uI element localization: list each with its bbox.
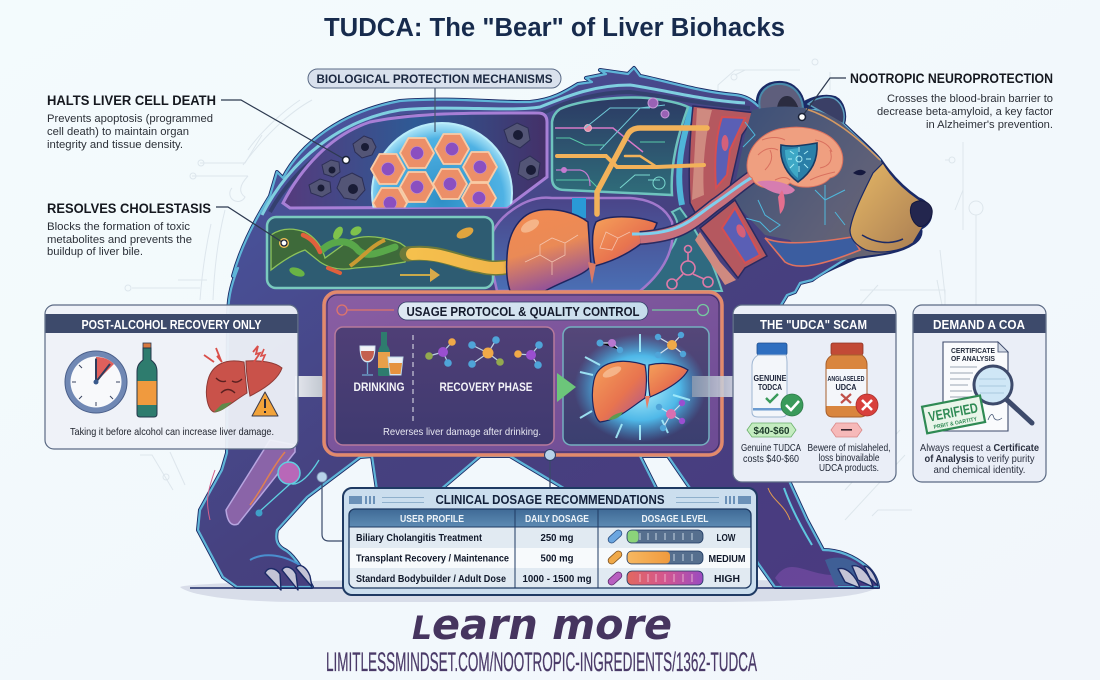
- callout: resolves cholestasis: [47, 201, 287, 258]
- drinking and recovery panel: Reverses liver damage after drinking.: [383, 426, 541, 438]
- callout: nootropic neuroprotection: in Alzheimer's prevention.: [926, 119, 1053, 131]
- drinking and recovery panel: DRINKING: [354, 382, 405, 394]
- table: clinical dosage recommendations: CLINICAL DOSAGE RECOMMENDATIONS: [436, 493, 664, 507]
- icon: wine glass: [360, 346, 375, 375]
- orange vessels: [557, 128, 707, 214]
- level bar: medium: MEDIUM: [708, 554, 746, 565]
- icon: certificate: OF ANALYSIS: [951, 356, 995, 363]
- panel: post-alcohol recovery only: [45, 305, 327, 449]
- usage header pill: USAGE PROTOCOL & QUALITY CONTROL: [406, 305, 640, 319]
- pill: biological protection mechanisms: BIOLOGICAL PROTECTION MECHANISMS: [316, 74, 553, 86]
- arrow to usage panel: [295, 376, 327, 397]
- protective bubble with cells: [370, 122, 513, 208]
- claws: [265, 566, 312, 590]
- icon: damaged liver: [204, 346, 282, 412]
- head: [732, 84, 932, 266]
- blue band beside circuit panel: [679, 107, 692, 205]
- verified stamp: [922, 396, 985, 433]
- table grid: 1000 - 1500 mg: [522, 573, 592, 585]
- icon: clock: [65, 351, 127, 413]
- verified stamp: VERIFIED: [927, 399, 979, 425]
- panel: demand a COA: and chemical identity.: [934, 464, 1026, 476]
- callout: halts liver cell death: integrity and tissue density.: [47, 139, 183, 151]
- icon: molecules around liver: [596, 332, 686, 431]
- panel: bile duct: [267, 217, 525, 288]
- header: [914, 314, 1045, 333]
- minus tag: [831, 423, 862, 437]
- drinking and recovery panel: RECOVERY PHASE: [440, 382, 533, 394]
- icon: bottle: [378, 332, 390, 376]
- callout: halts liver cell death: Prevents apoptosis (programmed: [47, 113, 213, 125]
- level bar: low: LOW: [716, 533, 736, 544]
- verified stamp: PRBIT & OARTITY: [933, 417, 978, 431]
- panel: demand a COA: [913, 305, 1046, 482]
- icon: tumbler: [388, 357, 403, 375]
- panel: the UDCA scam: [692, 305, 896, 482]
- callout: nootropic neuroprotection: decrease beta-amyloid, a key factor: [877, 106, 1053, 118]
- panel: neck vessels upper: [689, 106, 757, 222]
- table grid: Transplant Recovery / Maintenance: [356, 552, 509, 564]
- connector: usage to table: [544, 450, 556, 490]
- price tag: [747, 423, 796, 437]
- callout: resolves cholestasis: Blocks the formation of toxic: [47, 221, 191, 233]
- table grid: DOSAGE LEVEL: [642, 513, 709, 525]
- hind leg detail: [208, 440, 319, 590]
- panel: usage protocol and quality control: [324, 292, 722, 455]
- panel: the UDCA scam: UDCA products.: [819, 463, 879, 474]
- panel: the UDCA scam: Genuine TUDCA: [741, 443, 801, 454]
- nose: [910, 201, 932, 226]
- level bar: medium: [607, 550, 746, 565]
- icon: bottle: [137, 343, 157, 417]
- arrow: green: [557, 373, 576, 402]
- icon: certificate: [943, 342, 1008, 431]
- damaged cells: [309, 123, 540, 200]
- snout: [850, 163, 926, 252]
- icon: shield: [781, 143, 817, 182]
- drinking and recovery panel: [335, 327, 554, 445]
- level bar: low: [607, 529, 736, 544]
- callout: nootropic neuroprotection: Crosses the blood-brain barrier to: [887, 93, 1053, 105]
- icon: mislabeled bottle: [826, 343, 878, 417]
- header: POST-ALCOHOL RECOVERY ONLY: [82, 318, 262, 332]
- bear illustration: [190, 68, 932, 590]
- icon: warning triangle: [252, 392, 278, 416]
- call to action: learn more: Learn more: [412, 600, 672, 649]
- pill: biological protection mechanisms: [308, 69, 561, 132]
- icon: mislabeled bottle: ANGLASELED: [828, 376, 864, 383]
- liver: [507, 210, 657, 291]
- header: [46, 314, 297, 333]
- callout: resolves cholestasis: buildup of liver bile.: [47, 246, 143, 258]
- table grid: USER PROFILE: [400, 513, 464, 525]
- front leg detail: [190, 488, 880, 588]
- bear silhouette: [198, 68, 930, 587]
- panel: circuit network: [552, 97, 688, 195]
- panel: the UDCA scam: Bewere of mislaheled,: [808, 443, 890, 454]
- header: [734, 314, 895, 333]
- ears: [759, 84, 844, 124]
- table grid: 250 mg: [540, 532, 574, 544]
- icon: mislabeled bottle: UDCA: [836, 383, 857, 392]
- eye: [853, 170, 866, 175]
- header: THE "UDCA" SCAM: [760, 318, 867, 332]
- panel: lower teal molecule pocket: [640, 208, 722, 291]
- healed liver panel: [563, 327, 709, 445]
- callout: nootropic neuroprotection: [798, 71, 1053, 131]
- icon: magnifier: [974, 366, 1032, 423]
- level bar: high: [607, 571, 740, 586]
- ground shadow: [180, 579, 880, 602]
- table grid: Biliary Cholangitis Treatment: [356, 532, 482, 544]
- icon: genuine bottle: TODCA: [758, 383, 782, 392]
- callout: resolves cholestasis: RESOLVES CHOLESTASIS: [47, 201, 211, 216]
- table grid: Standard Bodybuilder / Adult Dose: [356, 573, 506, 585]
- panel: liver pocket: [488, 198, 673, 291]
- callout: halts liver cell death: cell death) to maintain organ: [47, 126, 189, 138]
- panel: the UDCA scam: costs $40-$60: [743, 454, 799, 465]
- pipe to brain: [632, 172, 762, 238]
- price tag: $40-$60: [754, 426, 790, 437]
- table grid: DAILY DOSAGE: [525, 513, 589, 525]
- title: TUDCA: The "Bear" of Liver Biohacks: [324, 14, 785, 42]
- back contour band: [262, 85, 745, 215]
- icon: certificate: CERTIFICATE: [951, 348, 995, 355]
- panel: cell protection: [281, 112, 548, 210]
- brain: [747, 127, 843, 214]
- callout: halts liver cell death: [47, 93, 350, 164]
- icon: genuine bottle: GENUINE: [754, 374, 787, 383]
- panel: the UDCA scam: loss binovailable: [818, 453, 880, 464]
- panel: neck vessels lower: [695, 200, 767, 285]
- table grid: [349, 509, 751, 588]
- panel: demand a COA: of Analysis to verify purity: [924, 453, 1035, 465]
- header: DEMAND A COA: [933, 318, 1025, 332]
- neck band: [765, 237, 860, 266]
- callout: halts liver cell death: HALTS LIVER CELL DEATH: [47, 93, 216, 108]
- connector: leg to table: [317, 472, 344, 541]
- table grid: 500 mg: [540, 552, 574, 564]
- callout: resolves cholestasis: metabolites and prevents the: [47, 234, 192, 246]
- icon: genuine bottle: [752, 343, 803, 417]
- table: clinical dosage recommendations: [343, 488, 757, 595]
- panel: post-alcohol recovery only: Taking it before alcohol can increase liver damage.: [70, 426, 274, 438]
- panel: demand a COA: Always request a Certificate: [920, 442, 1039, 454]
- level bar: high: HIGH: [714, 574, 740, 585]
- icon: molecules: [425, 336, 543, 369]
- arrow from usage panel: [692, 376, 735, 397]
- callout: nootropic neuroprotection: NOOTROPIC NEUROPROTECTION: [850, 71, 1053, 86]
